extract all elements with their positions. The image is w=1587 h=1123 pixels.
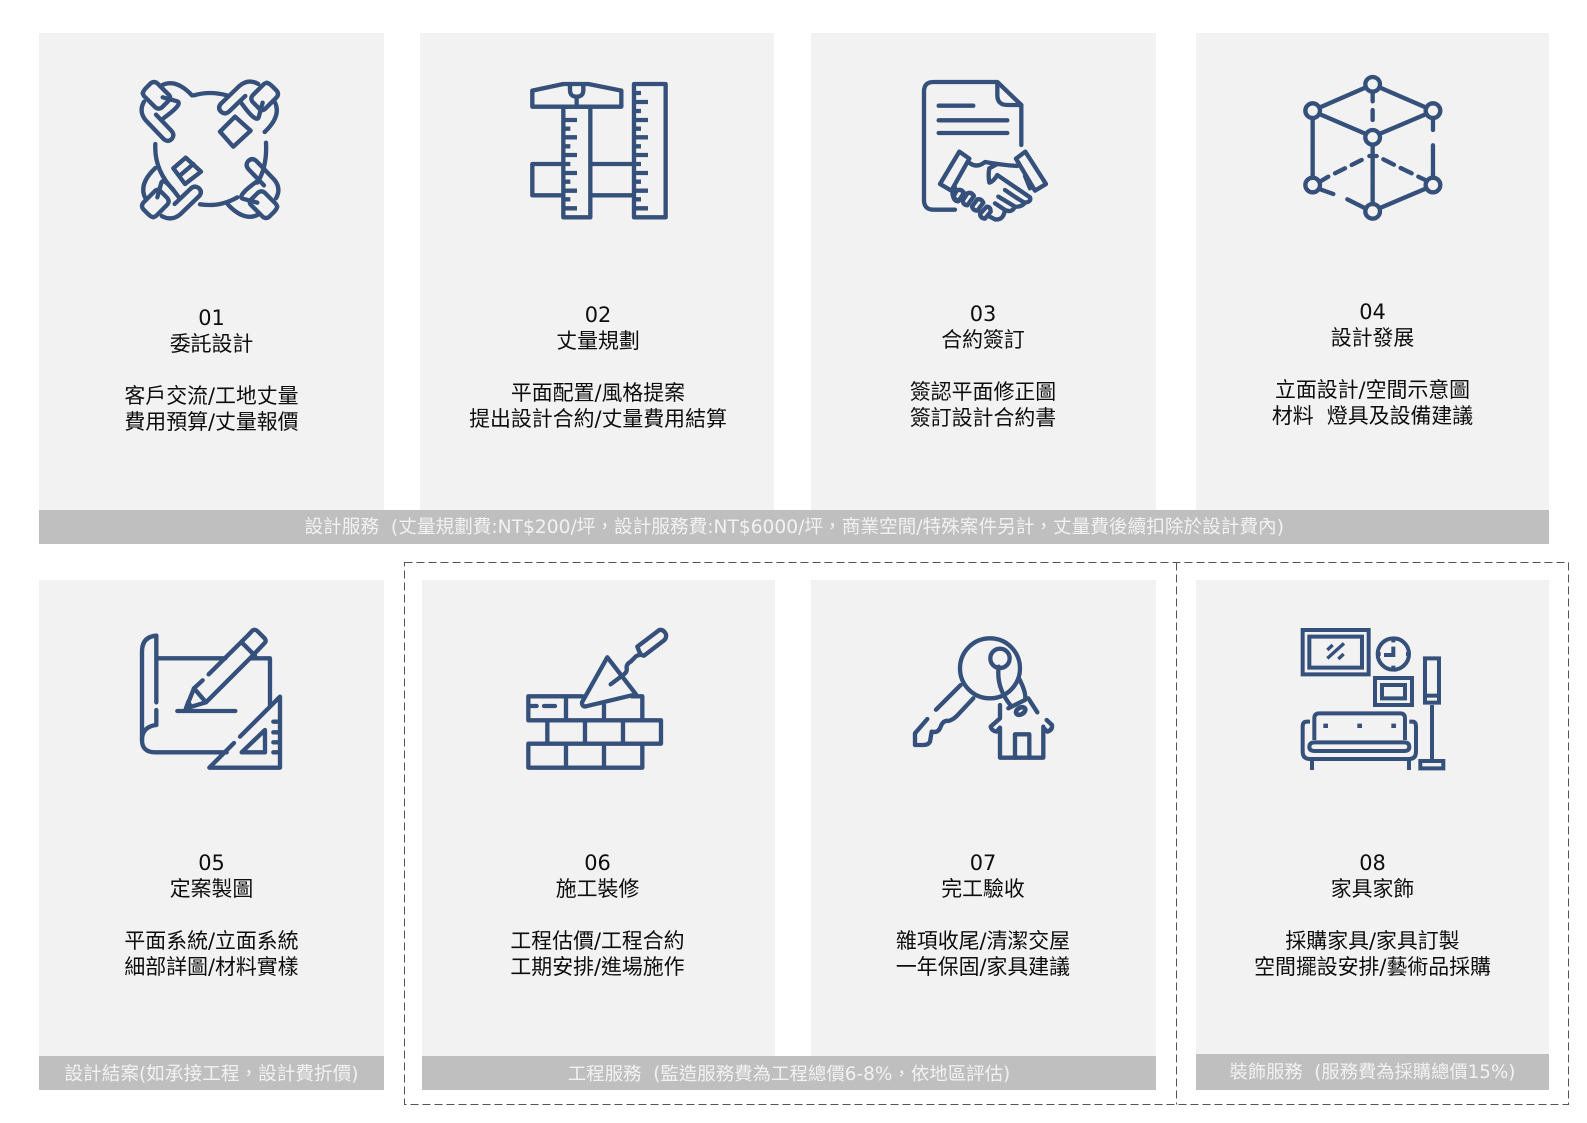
decoration service fee bar xyxy=(1196,1054,1549,1090)
step 01 text: 01 委託設計 客戶交流/工地丈量 費用預算/丈量報價 xyxy=(124,306,299,434)
step 06 text: 06 施工裝修 工程估價/工程合約 工期安排/進場施作 xyxy=(510,851,685,979)
step 08 text: 08 家具家飾 採購家具/家具訂製 空間擺設安排/藝術品採購 xyxy=(1254,851,1491,979)
design closure bar: 設計結案(如承接工程，設計費折價) xyxy=(64,1064,359,1085)
panel: step 05 background xyxy=(38,580,384,1057)
panel: step 08 background xyxy=(1196,580,1549,1055)
step 03 text: 03 合約簽訂 簽認平面修正圖 簽訂設計合約書 xyxy=(910,302,1056,430)
panel: step 04 background xyxy=(1196,32,1549,510)
step 04 text: 04 設計發展 立面設計/空間示意圖 材料 燈具及設備建議 xyxy=(1272,300,1473,428)
construction service fee bar xyxy=(422,1056,1156,1090)
step 05 text: 05 定案製圖 平面系統/立面系統 細部詳圖/材料實樣 xyxy=(124,851,299,979)
design service fee bar xyxy=(38,510,1549,544)
decoration service fee bar: 裝飾服務 (服務費為採購總價15%) xyxy=(1230,1062,1515,1083)
panel: step 03 background xyxy=(811,32,1156,510)
step 02 text: 02 丈量規劃 平面配置/風格提案 提出設計合約/丈量費用結算 xyxy=(469,303,727,431)
panel: step 06 background xyxy=(422,580,775,1057)
design closure bar xyxy=(38,1056,384,1090)
design service fee bar: 設計服務 (丈量規劃費:NT$200/坪，設計服務費:NT$6000/坪，商業空間/特殊案件另計，丈量費後續扣除於設計費內) xyxy=(305,517,1284,538)
step 07 text: 07 完工驗收 雜項收尾/清潔交屋 一年保固/家具建議 xyxy=(896,851,1070,979)
panel: step 02 background xyxy=(420,32,774,510)
panel: step 01 background xyxy=(38,32,384,510)
construction service fee bar: 工程服務 (監造服務費為工程總價6-8%，依地區評估) xyxy=(568,1064,1010,1085)
panel: step 07 background xyxy=(811,580,1156,1057)
